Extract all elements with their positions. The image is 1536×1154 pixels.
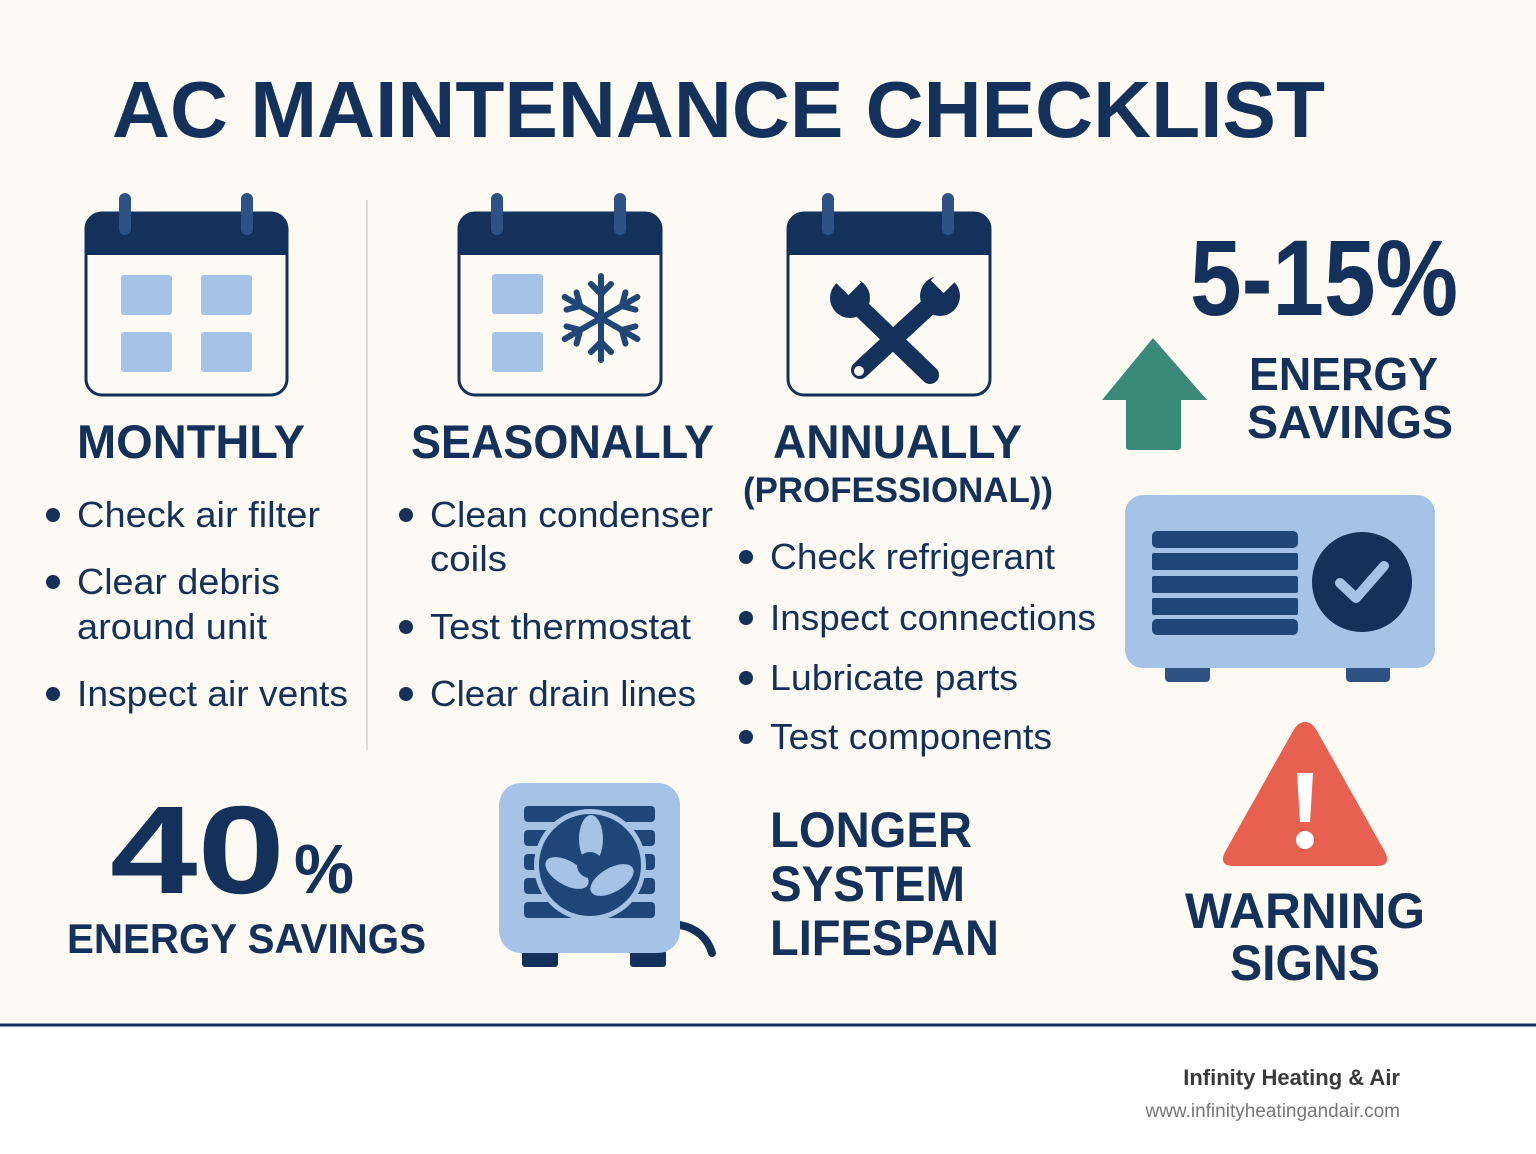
footer: company info: Infinity Heating & Air	[1183, 1065, 1400, 1090]
icon: monthly calendar	[86, 193, 287, 395]
list: monthly	[46, 494, 348, 714]
title: AC MAINTENANCE CHECKLIST	[112, 65, 1325, 154]
stat: 5-15%: 5-15%	[1190, 217, 1458, 338]
label: energy savings: ENERGY	[1249, 348, 1438, 400]
heading: seasonally: SEASONALLY	[411, 415, 714, 468]
icon: warning triangle	[1223, 722, 1387, 866]
label: warning signs: SIGNS	[1230, 935, 1380, 991]
list: annual: Inspect connections	[770, 597, 1096, 638]
label: warning signs: WARNING	[1185, 883, 1425, 939]
icon: annual calendar tools	[788, 193, 990, 395]
list: monthly: around unit	[77, 606, 267, 647]
list: seasonal: Test thermostat	[430, 606, 691, 647]
heading: annually	[743, 415, 1053, 510]
list: annual: Test components	[770, 716, 1052, 757]
icon: seasonal calendar	[459, 193, 661, 395]
footer: company info	[1144, 1065, 1400, 1122]
list: seasonal	[399, 494, 713, 714]
label: warning signs	[1185, 883, 1425, 991]
label: longer system lifespan	[770, 802, 999, 966]
label: longer system lifespan: LONGER	[770, 802, 972, 858]
stat: 40%: 40	[110, 781, 285, 920]
icon: outdoor fan unit	[499, 783, 712, 967]
stat: 40%: ENERGY SAVINGS	[67, 915, 426, 962]
list: annual: Check refrigerant	[770, 536, 1055, 577]
label: longer system lifespan: SYSTEM	[770, 856, 965, 912]
icon: ac unit with check	[1125, 495, 1435, 682]
label: longer system lifespan: LIFESPAN	[770, 910, 999, 966]
list: monthly: Clear debris	[77, 561, 280, 602]
stat: 40%: %	[294, 830, 354, 908]
list: annual	[739, 536, 1096, 757]
list: monthly: Check air filter	[77, 494, 320, 535]
heading: monthly: MONTHLY	[77, 415, 305, 468]
heading: annually: ANNUALLY	[773, 415, 1022, 468]
list: seasonal: Clear drain lines	[430, 673, 696, 714]
heading: annually: (PROFESSIONAL))	[743, 471, 1053, 510]
label: energy savings: SAVINGS	[1247, 396, 1453, 448]
list: seasonal: coils	[430, 538, 507, 579]
stat: 40%	[67, 781, 426, 962]
footer: company info: www.infinityheatingandair.com	[1144, 1101, 1400, 1122]
icon: green arrow	[1102, 338, 1207, 450]
list: monthly: Inspect air vents	[77, 673, 348, 714]
label: energy savings	[1247, 348, 1453, 448]
list: seasonal: Clean condenser	[430, 494, 713, 535]
list: annual: Lubricate parts	[770, 657, 1018, 698]
